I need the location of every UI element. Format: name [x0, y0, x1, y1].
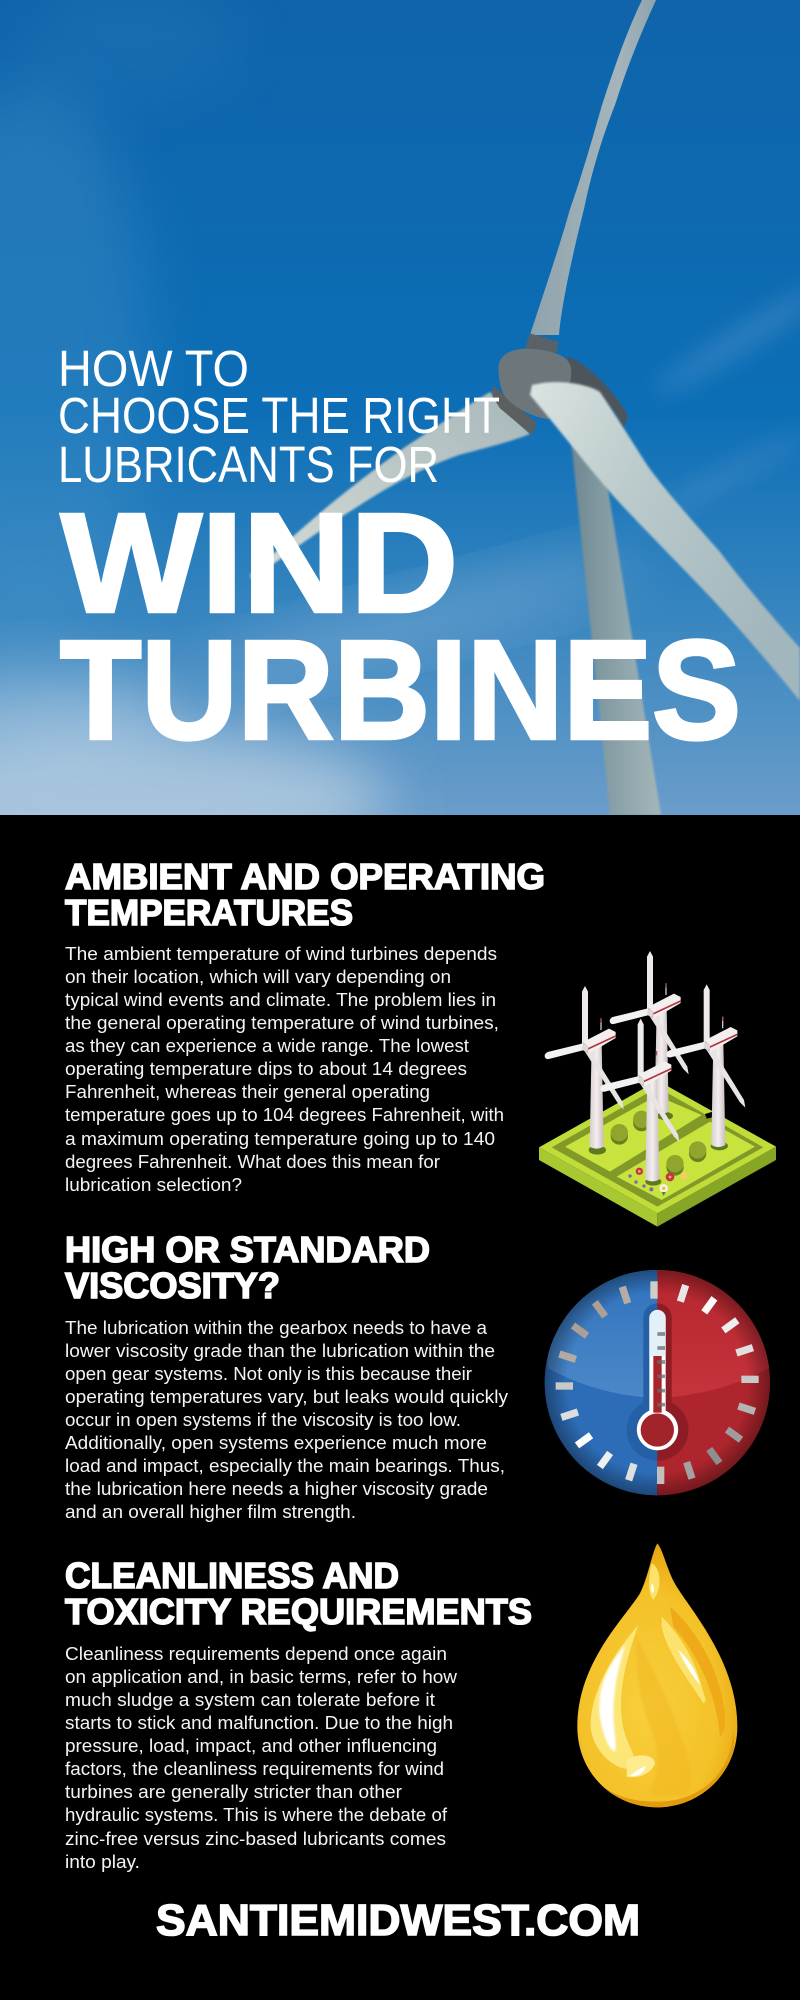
section 3: cleanliness and toxicity requirements	[65, 1555, 532, 1872]
title: TURBINES: TURBINES	[60, 610, 741, 768]
body text: on their location, which will vary depending on	[65, 967, 451, 987]
icon: golden oil drop	[570, 1543, 737, 1813]
heading line 1: HIGH OR STANDARD	[65, 1229, 430, 1270]
body text: the lubrication here needs a higher viscosity grade	[65, 1479, 488, 1499]
body text: hydraulic systems. This is where the debate of	[65, 1805, 448, 1825]
heading line 2: TEMPERATURES	[65, 892, 353, 933]
right blade	[530, 382, 800, 701]
body text: occur in open systems if the viscosity is too low.	[65, 1410, 461, 1430]
body text: Additionally, open systems experience much more	[65, 1433, 487, 1453]
body text: on application and, in basic terms, refer to how	[65, 1667, 458, 1687]
heading line 2: TOXICITY REQUIREMENTS	[65, 1591, 532, 1632]
body text: pressure, load, impact, and other influencing	[65, 1736, 437, 1756]
body text	[65, 944, 504, 1195]
body text: into play.	[65, 1852, 140, 1872]
body text	[65, 1644, 458, 1872]
body text: open gear systems. Not only is this because their	[65, 1364, 472, 1384]
body text: turbines are generally stricter than other	[65, 1782, 402, 1802]
body text: lower viscosity grade than the lubrication within the	[65, 1341, 495, 1361]
title intro line 2: CHOOSE THE RIGHT	[58, 387, 500, 444]
upper blade	[530, 0, 656, 335]
body text: degrees Fahrenheit. What does this mean for	[65, 1152, 440, 1172]
body text: zinc-free versus zinc-based lubricants comes	[65, 1829, 446, 1849]
body text: The ambient temperature of wind turbines depends	[65, 944, 497, 964]
footer website: SANTIEMIDWEST.COM	[156, 1896, 640, 1945]
body text: typical wind events and climate. The problem lies in	[65, 990, 496, 1010]
body text: the general operating temperature of wind turbines,	[65, 1013, 499, 1033]
nacelle hub	[493, 333, 627, 435]
body text	[65, 1318, 508, 1522]
icon: temperature gauge with thermometer	[543, 1268, 771, 1498]
body text: Fahrenheit, whereas their general operating	[65, 1082, 430, 1102]
gauge tick marks	[556, 1281, 759, 1484]
hero photo: wind turbine against blue sky	[0, 0, 800, 875]
body text: a maximum operating temperature going up to 140	[65, 1129, 495, 1149]
body text: operating temperature dips to about 14 degrees	[65, 1059, 467, 1079]
title: WIND: WIND	[61, 484, 458, 642]
heading line 1: AMBIENT AND OPERATING	[65, 856, 545, 897]
body text: and an overall higher film strength.	[65, 1502, 356, 1522]
body text: Cleanliness requirements depend once again	[65, 1644, 447, 1664]
heading line 1: CLEANLINESS AND	[65, 1555, 399, 1596]
title intro line 1: HOW TO	[58, 340, 249, 397]
body text: much sludge a system can tolerate before it	[65, 1690, 435, 1710]
body text: temperature goes up to 104 degrees Fahrenheit, with	[65, 1105, 504, 1125]
body text: as they can experience a wide range. The lowest	[65, 1036, 469, 1056]
body text: load and impact, especially the main bearings. Thus,	[65, 1456, 505, 1476]
turbine tower	[571, 440, 661, 815]
body text: starts to stick and malfunction. Due to the high	[65, 1713, 453, 1733]
icon: isometric wind farm	[539, 951, 776, 1227]
section 1: ambient and operating temperatures	[65, 856, 545, 1195]
body text: operating temperatures vary, but leaks would quickly	[65, 1387, 508, 1407]
section 2: high or standard viscosity	[65, 1229, 508, 1522]
heading line 2: VISCOSITY?	[65, 1265, 280, 1306]
body text: lubrication selection?	[65, 1175, 242, 1195]
title intro line 3: LUBRICANTS FOR	[58, 436, 439, 493]
body text: factors, the cleanliness requirements for wind	[65, 1759, 444, 1779]
body text: The lubrication within the gearbox needs to have a	[65, 1318, 488, 1338]
left blade	[250, 392, 530, 580]
thermometer	[627, 1303, 688, 1461]
